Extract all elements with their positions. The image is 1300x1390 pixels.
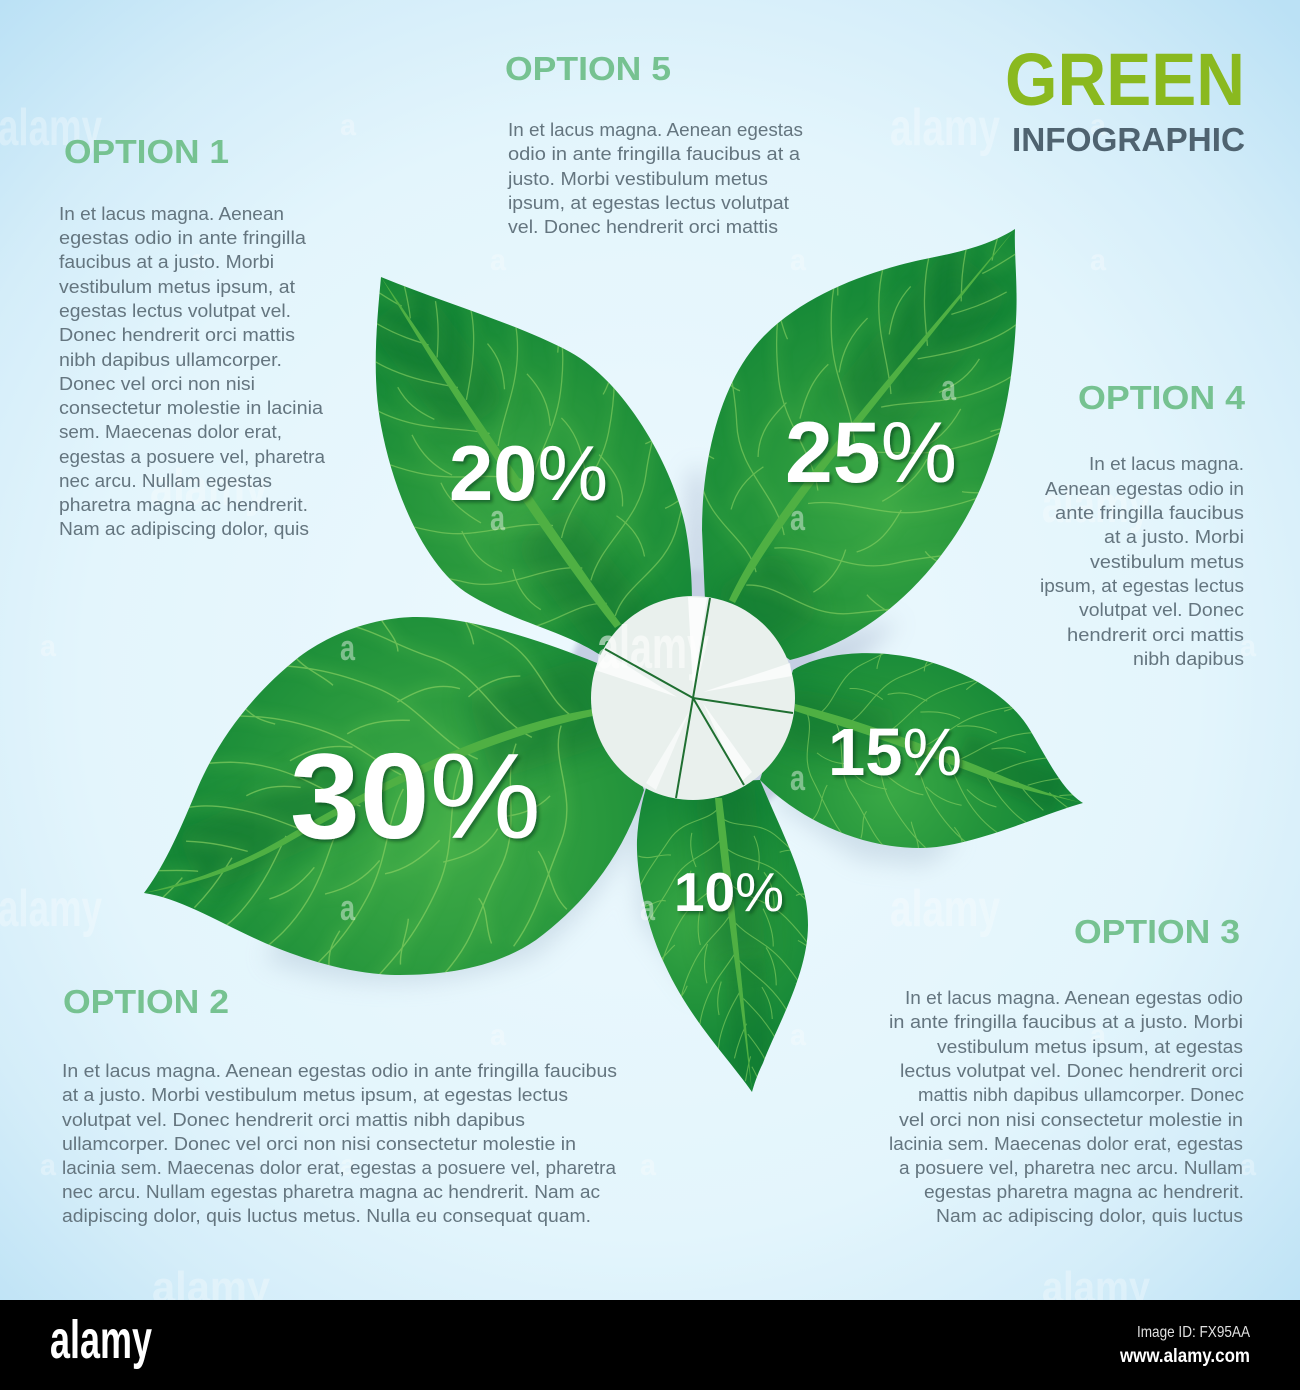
- value: 10%: 10%: [674, 861, 784, 923]
- text block: option 2: at a justo. Morbi vestibulum metus ipsum, at egestas lectus: [62, 1085, 568, 1105]
- text block: option 1: Nam ac adipiscing dolor, quis: [59, 519, 309, 539]
- text block: option 2: nec arcu. Nullam egestas pharetra magna ac hendrerit. Nam ac: [62, 1182, 600, 1202]
- text block: option 5: vel. Donec hendrerit orci mattis: [508, 217, 778, 237]
- watermarks: a: [490, 1019, 506, 1052]
- watermarks: alamy: [152, 1263, 270, 1312]
- text block: option 1: egestas lectus volutpat vel.: [59, 301, 291, 321]
- watermarks: a: [190, 244, 206, 277]
- text block: option 1: [59, 204, 326, 539]
- value: 25%: 25%: [785, 405, 957, 501]
- watermarks: a: [340, 109, 356, 142]
- watermarks: alamy: [890, 880, 1000, 938]
- heading: option 2: OPTION 2: [63, 983, 229, 1020]
- watermarks: a: [1240, 630, 1256, 663]
- text block: option 5: In et lacus magna. Aenean egestas: [508, 120, 803, 140]
- text block: option 3: lacinia sem. Maecenas dolor erat, egestas: [889, 1134, 1243, 1154]
- text block: option 3: lectus volutpat vel. Donec hendrerit orci: [900, 1061, 1243, 1081]
- leaf watermark letters: [340, 367, 957, 928]
- text block: option 3: In et lacus magna. Aenean egestas odio: [905, 988, 1243, 1008]
- text block: option 2: [62, 1061, 617, 1226]
- text block: option 1: nibh dapibus ullamcorper.: [59, 350, 282, 370]
- leaf watermark letters: a: [790, 497, 806, 538]
- text block: option 1: nec arcu. Nullam egestas: [59, 471, 272, 491]
- watermarks: alamy: [0, 880, 102, 938]
- value: 20%: 20%: [449, 429, 608, 517]
- title: INFOGRAPHIC: [1012, 121, 1245, 158]
- text block: option 2: In et lacus magna. Aenean egestas odio in ante fringilla faucibus: [62, 1061, 617, 1081]
- watermarks: a: [790, 1019, 806, 1052]
- watermarks: a: [40, 630, 56, 663]
- text block: option 4: ipsum, at egestas lectus: [1040, 576, 1244, 596]
- text block: option 3: egestas pharetra magna ac hendrerit.: [924, 1182, 1244, 1202]
- text block: option 2: lacinia sem. Maecenas dolor erat, egestas a posuere vel, pharetra: [62, 1158, 617, 1178]
- text block: option 2: volutpat vel. Donec hendrerit orci mattis nibh dapibus: [62, 1110, 525, 1130]
- title: GREEN: [1005, 38, 1245, 121]
- leaf: 15%: [760, 653, 1083, 848]
- watermarks: a: [340, 1149, 356, 1182]
- watermarks: a: [790, 244, 806, 277]
- leaf: 25%: [702, 229, 1017, 660]
- footer bar: Image ID: FX95AA: [1137, 1324, 1250, 1341]
- text block: option 1: Donec vel orci non nisi: [59, 374, 255, 394]
- leaf watermark letters: a: [340, 887, 356, 928]
- text block: option 5: justo. Morbi vestibulum metus: [507, 169, 768, 189]
- watermarks: a: [1090, 1019, 1106, 1052]
- text block: option 1: faucibus at a justo. Morbi: [59, 252, 274, 272]
- leaf shadows: [265, 470, 960, 1000]
- watermarks: a: [940, 1149, 956, 1182]
- text block: option 3: vel orci non nisi consectetur molestie in: [899, 1110, 1243, 1130]
- watermarks: a: [640, 1149, 656, 1182]
- leaf: 10%: [636, 780, 808, 1092]
- watermarks: alamy: [0, 99, 102, 157]
- text block: option 1: sem. Maecenas dolor erat,: [59, 422, 282, 442]
- text block: option 4: ante fringilla faucibus: [1055, 503, 1244, 523]
- text block: option 4: In et lacus magna.: [1089, 454, 1244, 474]
- leaf watermark letters: a: [790, 757, 806, 798]
- watermarks: alamy: [890, 99, 1000, 157]
- text block: option 1: egestas odio in ante fringilla: [59, 228, 307, 248]
- text block: option 3: in ante fringilla faucibus at a justo. Morbi: [889, 1012, 1243, 1032]
- pie chart centre: [591, 596, 795, 800]
- heading: option 4: OPTION 4: [1078, 379, 1246, 416]
- text block: option 4: hendrerit orci mattis: [1067, 625, 1244, 645]
- text block: option 3: Nam ac adipiscing dolor, quis luctus: [936, 1206, 1243, 1226]
- value: 30%: 30%: [290, 728, 541, 864]
- leaf watermark letters: a: [640, 887, 656, 928]
- text block: option 3: vestibulum metus ipsum, at egestas: [937, 1037, 1243, 1057]
- text block: option 1: consectetur molestie in lacinia: [59, 398, 324, 418]
- text block: option 5: ipsum, at egestas lectus volutpat: [508, 193, 789, 213]
- leaf watermark letters: a: [340, 627, 356, 668]
- text block: option 1: vestibulum metus ipsum, at: [59, 277, 295, 297]
- text block: option 3: a posuere vel, pharetra nec arcu. Nullam: [899, 1158, 1243, 1178]
- watermarks: a: [1090, 109, 1106, 142]
- text block: option 1: pharetra magna ac hendrerit.: [59, 495, 308, 515]
- leaf: 30%: [144, 617, 644, 975]
- text block: option 1: In et lacus magna. Aenean: [59, 204, 284, 224]
- text block: option 4: volutpat vel. Donec: [1079, 600, 1244, 620]
- watermarks: alamy: [1042, 476, 1150, 534]
- watermarks: alamy: [1042, 1263, 1150, 1312]
- text block: option 3: mattis nibh dapibus ullamcorper. Donec: [918, 1085, 1244, 1105]
- text block: option 4: nibh dapibus: [1133, 649, 1244, 669]
- text block: option 4: [1040, 454, 1244, 669]
- text block: option 4: vestibulum metus: [1090, 552, 1244, 572]
- value: 15%: 15%: [828, 715, 962, 790]
- leaf watermark letters: a: [490, 497, 506, 538]
- footer bar: www.alamy.com: [1119, 1346, 1250, 1367]
- footer bar: alamy: [50, 1310, 152, 1370]
- leaf watermark letters: a: [941, 367, 957, 408]
- text block: option 4: at a justo. Morbi: [1104, 527, 1244, 547]
- text block: option 1: egestas a posuere vel, pharetra: [59, 447, 326, 467]
- text block: option 5: odio in ante fringilla faucibus at a: [508, 144, 801, 164]
- heading: option 3: OPTION 3: [1074, 913, 1240, 950]
- text block: option 2: adipiscing dolor, quis luctus metus. Nulla eu consequat quam.: [62, 1206, 591, 1226]
- heading: option 5: OPTION 5: [505, 50, 671, 87]
- title: [1005, 38, 1245, 158]
- text block: option 5: [507, 120, 803, 237]
- text block: option 4: Aenean egestas odio in: [1045, 479, 1244, 499]
- watermarks: a: [1240, 1149, 1256, 1182]
- leaf: 20%: [376, 277, 692, 655]
- text block: option 1: Donec hendrerit orci mattis: [59, 325, 295, 345]
- text block: option 3: [889, 988, 1244, 1226]
- watermarks: a: [40, 1149, 56, 1182]
- watermarks: a: [490, 244, 506, 277]
- footer bar: [0, 1300, 1300, 1390]
- watermarks: a: [1090, 244, 1106, 277]
- text block: option 2: ullamcorper. Donec vel orci non nisi consectetur molestie in: [62, 1134, 576, 1154]
- pie chart centre: alamy: [597, 614, 709, 681]
- heading: option 1: OPTION 1: [64, 133, 229, 170]
- watermarks: alamy: [150, 459, 268, 517]
